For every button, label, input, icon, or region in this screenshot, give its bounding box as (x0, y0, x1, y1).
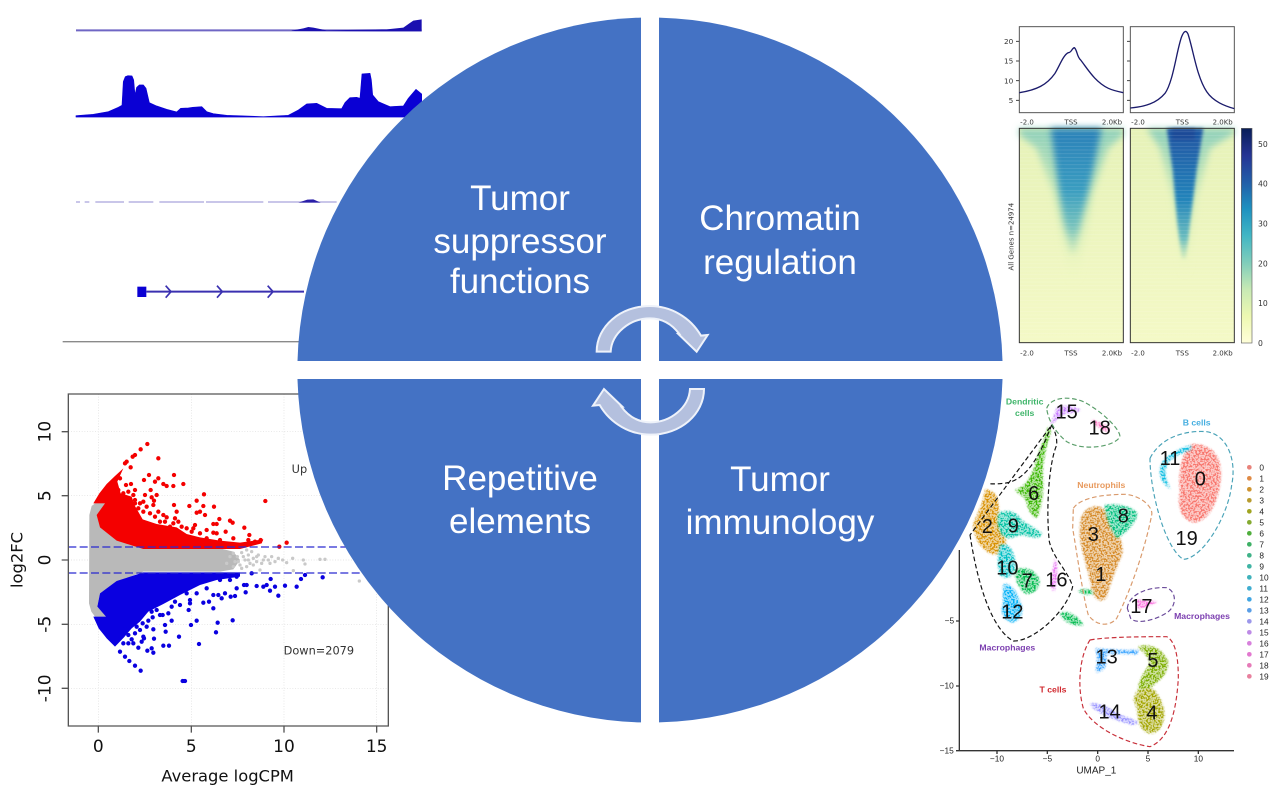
profile axis labels: 2.0Kb (1102, 119, 1123, 127)
cluster legend: 3 (1259, 495, 1264, 505)
grey non-significant points (89, 503, 359, 617)
y tick labels: -10 (36, 674, 56, 702)
cluster legend: 12 (1259, 594, 1269, 604)
quadrant: tumor suppressor functions: Tumor (470, 179, 570, 218)
panel: UMAP clusters (940, 397, 1269, 777)
x tick labels: 5 (186, 737, 197, 757)
gene model (137, 286, 304, 298)
colorbar: 30 (1258, 220, 1268, 229)
quadrant: chromatin regulation (659, 18, 1002, 361)
y tick labels: 0 (36, 555, 56, 565)
cell type labels: Dendritic (1006, 397, 1044, 407)
cluster legend: 14 (1259, 616, 1269, 626)
profile plot left: 5 (1009, 96, 1014, 105)
cell type labels: Macrophages (979, 642, 1035, 652)
UMAP axes: UMAP_1 (1076, 766, 1117, 777)
quadrant: repetitive elements: elements (449, 502, 591, 541)
cluster legend: 10 (1259, 572, 1269, 582)
UMAP axes: 10 (1194, 754, 1203, 764)
cluster legend: 6 (1259, 528, 1264, 538)
cluster legend: 19 (1259, 671, 1269, 681)
heatmap axis labels (1020, 349, 1233, 357)
UMAP axes: −5 (1043, 754, 1052, 764)
panel: TSS profiles and heatmaps (1004, 27, 1268, 357)
profile plot left (1004, 27, 1123, 113)
cluster legend: 1 (1259, 473, 1264, 483)
cluster numbers: 15 (1056, 401, 1078, 423)
UMAP axes: −10 (940, 681, 954, 691)
heatmap axis labels: TSS (1175, 349, 1189, 357)
cluster legend: 4 (1259, 506, 1264, 516)
cluster numbers (982, 401, 1206, 724)
cluster legend: 2 (1259, 484, 1264, 494)
cell type labels: B cells (1183, 418, 1211, 428)
cluster numbers: 17 (1130, 596, 1152, 618)
cell type labels: T cells (1040, 685, 1067, 695)
colorbar: 10 (1258, 299, 1268, 308)
cell type labels: cells (1015, 408, 1034, 418)
heatmap y label: All Genes n=24974 (1008, 202, 1016, 271)
cluster legend: 15 (1259, 627, 1269, 637)
colorbar (1241, 128, 1268, 348)
x tick labels: 15 (366, 737, 387, 757)
y axis title: log2FC (8, 532, 27, 588)
x tick labels (93, 737, 387, 757)
colorbar: 20 (1258, 259, 1268, 268)
cluster numbers: 16 (1045, 569, 1067, 591)
cluster numbers: 12 (1001, 602, 1023, 624)
x axis title: Average logCPM (161, 766, 294, 785)
cluster legend: 8 (1259, 550, 1264, 560)
heatmap axis labels: 2.0Kb (1213, 349, 1233, 357)
UMAP axes: −5 (945, 616, 954, 626)
cluster numbers: 10 (996, 558, 1018, 580)
cluster numbers: 13 (1096, 646, 1118, 668)
profile plot left: 20 (1004, 37, 1014, 46)
heatmap axis labels: -2.0 (1020, 349, 1034, 357)
cluster numbers: 7 (1022, 570, 1033, 592)
quadrant: tumor immunology: immunology (686, 503, 875, 542)
blue down-regulated points (93, 572, 323, 681)
UMAP axes (940, 550, 1234, 777)
cluster legend: 11 (1259, 583, 1268, 593)
quadrant: chromatin regulation: Chromatin (699, 199, 861, 238)
UMAP axes: 0 (1095, 754, 1100, 764)
central circle of four quadrants (298, 18, 1002, 722)
heatmap right (1130, 128, 1234, 343)
cluster numbers: 3 (1088, 524, 1099, 546)
cluster numbers: 9 (1008, 516, 1019, 538)
colorbar: 40 (1258, 180, 1268, 189)
cluster numbers: 19 (1176, 528, 1198, 550)
quadrant: chromatin regulation: regulation (703, 243, 857, 282)
profile axis labels: TSS (1063, 119, 1078, 127)
y tick labels: -5 (36, 616, 56, 633)
grid (68, 394, 388, 726)
profile plot left: 15 (1004, 57, 1014, 66)
quadrant: repetitive elements (298, 379, 641, 722)
heatmap axis labels: 2.0Kb (1102, 349, 1123, 357)
cell type labels: Neutrophils (1077, 480, 1126, 490)
profile axis labels: 2.0Kb (1213, 119, 1233, 127)
cluster numbers: 6 (1028, 483, 1039, 505)
profile axis labels: -2.0 (1020, 119, 1034, 127)
x tick labels: 0 (93, 737, 104, 757)
quadrant: tumor suppressor functions (298, 18, 641, 361)
UMAP axes: 5 (1146, 754, 1151, 764)
UMAP axes: −15 (940, 745, 954, 755)
panel: genome browser tracks (63, 19, 422, 342)
panel: MA plot (8, 394, 388, 785)
cluster numbers: 4 (1146, 702, 1158, 724)
quadrant: tumor suppressor functions: functions (450, 262, 590, 301)
cluster numbers: 0 (1195, 468, 1206, 490)
down label: Down=2079 (284, 644, 354, 658)
cluster legend: 7 (1259, 539, 1264, 549)
quadrant: repetitive elements: Repetitive (442, 459, 598, 498)
cluster numbers: 8 (1118, 505, 1129, 527)
red up-regulated points (93, 444, 287, 549)
track 2 (76, 73, 422, 117)
cluster numbers: 14 (1099, 701, 1121, 723)
cluster outlines (970, 398, 1233, 747)
colorbar: 50 (1258, 140, 1268, 149)
axes frame (62, 394, 388, 733)
quadrant: tumor immunology (659, 379, 1002, 722)
cluster legend: 9 (1259, 561, 1264, 571)
cell type labels: Macrophages (1174, 611, 1230, 621)
heatmap axis labels: -2.0 (1131, 349, 1145, 357)
cluster legend: 16 (1259, 638, 1269, 648)
cluster numbers: 2 (982, 516, 993, 538)
profile plot left: 10 (1004, 76, 1014, 85)
cluster legend: 5 (1259, 517, 1264, 527)
cluster numbers: 18 (1089, 417, 1111, 439)
cell type labels (979, 397, 1230, 695)
cell clusters (973, 406, 1221, 733)
cluster legend (1247, 462, 1269, 681)
cluster numbers: 11 (1160, 448, 1180, 470)
y tick labels: 10 (36, 421, 56, 442)
up label: Up (292, 462, 307, 476)
quadrant: tumor immunology: Tumor (730, 460, 830, 499)
cycle arrows (593, 306, 708, 435)
threshold lines (68, 547, 388, 573)
x tick labels: 10 (273, 737, 295, 757)
y tick labels (36, 421, 56, 702)
track 3 (76, 199, 337, 203)
profile axis labels: -2.0 (1131, 119, 1145, 127)
profile plot right (1127, 27, 1234, 113)
quadrant: tumor suppressor functions: suppressor (433, 222, 607, 261)
y tick labels: 5 (36, 490, 56, 501)
cluster numbers: 1 (1095, 564, 1107, 586)
cluster numbers: 5 (1147, 650, 1159, 672)
heatmap axis labels: TSS (1063, 349, 1078, 357)
cluster legend: 17 (1259, 649, 1269, 659)
cluster legend: 0 (1259, 462, 1264, 472)
profile axis labels: TSS (1175, 119, 1189, 127)
profile axis labels (1020, 119, 1233, 127)
track 1 (76, 19, 422, 31)
cluster legend: 13 (1259, 605, 1269, 615)
baseline (63, 340, 303, 344)
heatmap left (1019, 128, 1123, 343)
UMAP axes: −10 (990, 754, 1004, 764)
arrow: clockwise top (597, 306, 708, 352)
arrow: clockwise bottom (593, 389, 704, 435)
colorbar: 0 (1258, 339, 1263, 348)
cluster legend: 18 (1259, 660, 1269, 670)
